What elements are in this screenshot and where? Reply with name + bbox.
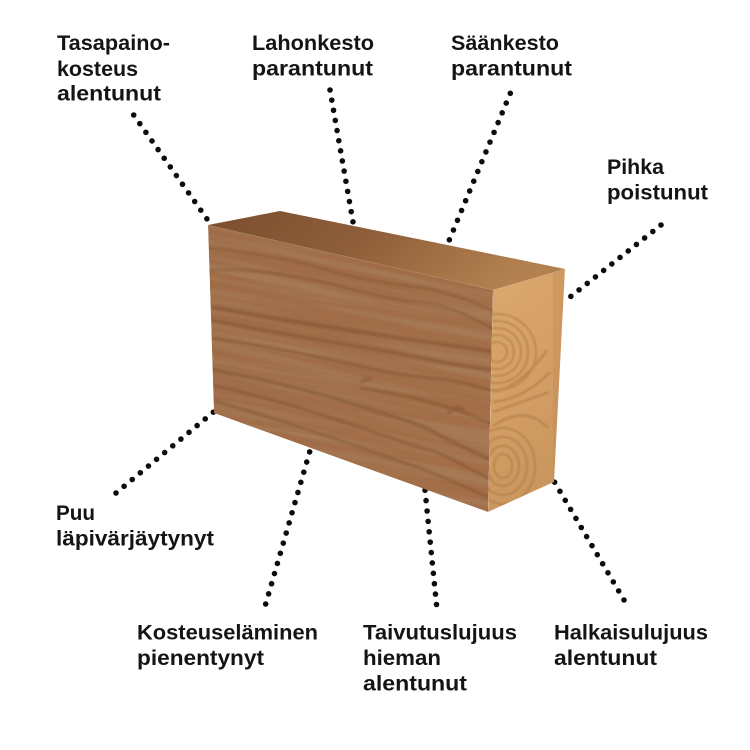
label: Halkaisulujuus alentunut bbox=[554, 620, 708, 670]
label: Halkaisulujuus alentunut: Halkaisulujuus bbox=[554, 620, 708, 644]
leader: Kosteuseläminen pienentynyt bbox=[266, 452, 310, 604]
label: Kosteuseläminen pienentynyt: pienentynyt bbox=[137, 646, 264, 670]
label: Taivutuslujuus hieman alentunut: hieman bbox=[363, 646, 441, 670]
label: Säänkesto parantunut: Säänkesto bbox=[451, 31, 559, 55]
leader: Pihka poistunut bbox=[571, 225, 661, 296]
front face bbox=[208, 225, 493, 512]
label: Säänkesto parantunut: parantunut bbox=[451, 56, 572, 80]
top face bbox=[208, 211, 565, 290]
leader: Taivutuslujuus hieman alentunut bbox=[425, 490, 436, 604]
label: Tasapainokosteus alentunut: kosteus bbox=[57, 57, 138, 81]
label: Puu läpivärjäytynyt bbox=[56, 501, 214, 550]
label: Pihka poistunut bbox=[607, 155, 708, 204]
wooden beam bbox=[208, 211, 565, 512]
label: Tasapainokosteus alentunut bbox=[57, 31, 170, 106]
label: Kosteuseläminen pienentynyt: Kosteuseläminen bbox=[137, 620, 318, 644]
label: Säänkesto parantunut bbox=[451, 31, 572, 80]
label: Tasapainokosteus alentunut: Tasapaino- bbox=[57, 31, 170, 55]
label: Kosteuseläminen pienentynyt bbox=[137, 620, 318, 670]
label: Tasapainokosteus alentunut: alentunut bbox=[57, 82, 161, 106]
label: Puu läpivärjäytynyt: läpivärjäytynyt bbox=[56, 526, 214, 550]
label: Lahonkesto parantunut bbox=[252, 31, 374, 80]
label: Puu läpivärjäytynyt: Puu bbox=[56, 501, 95, 525]
label: Taivutuslujuus hieman alentunut: alentunut bbox=[363, 672, 467, 696]
leader: Tasapainokosteus alentunut bbox=[134, 115, 207, 219]
leader: Lahonkesto parantunut bbox=[330, 90, 353, 222]
label: Pihka poistunut: poistunut bbox=[607, 180, 708, 204]
label: Taivutuslujuus hieman alentunut bbox=[363, 620, 517, 696]
leader: Säänkesto parantunut bbox=[449, 93, 510, 240]
label: Lahonkesto parantunut: Lahonkesto bbox=[252, 31, 374, 55]
label: Halkaisulujuus alentunut: alentunut bbox=[554, 646, 657, 670]
leader: Puu läpivärjäytynyt bbox=[116, 412, 214, 493]
label: Lahonkesto parantunut: parantunut bbox=[252, 56, 373, 80]
end grain face bbox=[488, 269, 565, 512]
label: Pihka poistunut: Pihka bbox=[607, 155, 665, 179]
leader: Halkaisulujuus alentunut bbox=[554, 482, 624, 600]
label: Taivutuslujuus hieman alentunut: Taivutuslujuus bbox=[363, 620, 517, 644]
